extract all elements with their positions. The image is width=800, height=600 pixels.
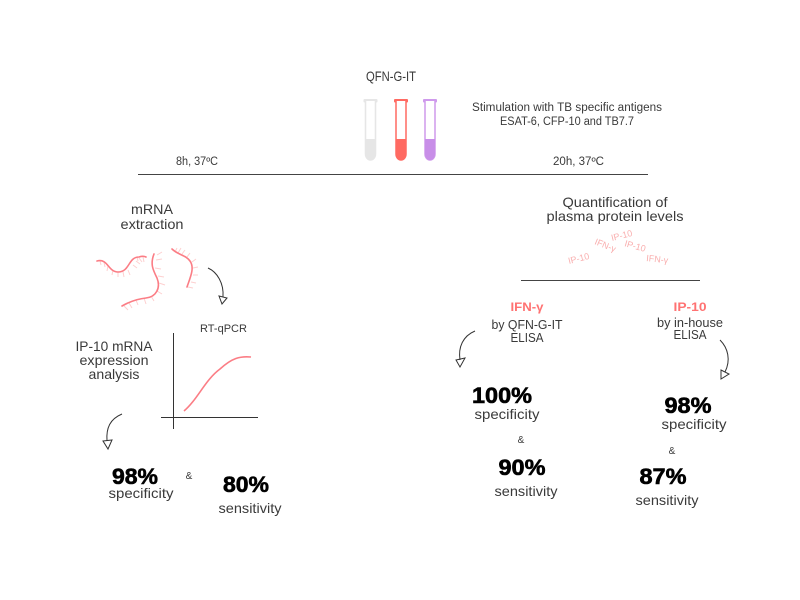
label: RT-qPCR: RT-qPCR xyxy=(200,323,247,335)
heading: quantification xyxy=(546,194,684,224)
timeline xyxy=(138,174,648,176)
heading: IP-10 mRNA expression analysis: expression xyxy=(80,352,148,368)
IFN-gamma label: by QFN-G-IT xyxy=(492,317,563,332)
IP-10 label: ELISA xyxy=(674,327,707,342)
IFN-gamma label: ELISA xyxy=(510,330,544,345)
stimulation text xyxy=(472,102,662,128)
heading: IP-10 mRNA expression analysis: IP-10 mRNA xyxy=(76,338,153,354)
result: 98% specificity xyxy=(108,464,174,501)
heading: mRNA extraction: extraction xyxy=(120,216,184,232)
icon: scattered proteins: IP-10 xyxy=(567,251,590,266)
label: 20h: 20h, 37ºC xyxy=(553,156,604,168)
heading: quantification: plasma protein levels xyxy=(546,208,684,224)
result: 90% sensitivity: sensitivity xyxy=(494,483,558,499)
icon: mRNA strands xyxy=(97,248,198,310)
result: 90% sensitivity xyxy=(494,455,558,499)
icon: test tubes xyxy=(364,99,437,160)
icon: scattered proteins: IFN-γ xyxy=(593,237,618,254)
title: QFN-G-IT xyxy=(366,68,416,84)
IFN-gamma label: IFN-γ xyxy=(510,300,544,314)
result: 90% sensitivity: 90% xyxy=(498,455,546,480)
IFN-gamma label xyxy=(492,300,563,345)
heading: mRNA extraction: mRNA xyxy=(131,201,174,217)
result: 87% sensitivity xyxy=(636,464,698,508)
arrow: to left results xyxy=(103,414,122,449)
label: 8h: 8h, 37ºC xyxy=(176,156,218,168)
result: 87% sensitivity: 87% xyxy=(640,464,686,489)
result: 98% specificity: specificity xyxy=(108,485,174,501)
IP-10 label: by in-house xyxy=(657,315,723,330)
IP-10 label: IP-10 xyxy=(674,300,707,314)
result: 98% specificity xyxy=(662,393,726,432)
arrow: to RT-qPCR xyxy=(208,268,227,304)
result: 98% specificity: specificity xyxy=(662,416,726,432)
IP-10 label xyxy=(657,300,723,342)
result: 80% sensitivity: 80% xyxy=(223,472,269,497)
result: 87% sensitivity: sensitivity xyxy=(636,492,698,508)
heading: IP-10 mRNA expression analysis: analysis xyxy=(88,366,140,382)
arrow: to IP-10 results xyxy=(720,340,729,379)
result: 80% sensitivity: sensitivity xyxy=(218,500,282,516)
result: 98% specificity: 98% xyxy=(664,393,712,418)
result: 98% specificity: 98% xyxy=(112,464,158,489)
arrow: to IFN results xyxy=(456,331,475,367)
icon: scattered proteins: IP-10 xyxy=(610,228,633,243)
heading: mRNA extraction xyxy=(120,201,184,232)
ampersand: & xyxy=(669,446,676,457)
result: 100% specificity xyxy=(472,383,540,422)
result: 100% specificity: specificity xyxy=(474,406,540,422)
heading: IP-10 mRNA expression analysis xyxy=(76,338,153,382)
icon: scattered proteins: IFN-γ xyxy=(646,253,669,265)
icon: scattered proteins xyxy=(567,228,669,266)
ampersand: & xyxy=(186,471,193,482)
divider xyxy=(521,280,700,282)
icon: scattered proteins: IP-10 xyxy=(623,238,647,254)
stimulation text: ESAT-6, CFP-10 and TB7.7 xyxy=(500,116,634,128)
ampersand: & xyxy=(518,435,525,446)
chart: qPCR curve xyxy=(161,333,258,429)
stimulation text: Stimulation with TB specific antigens xyxy=(472,102,662,114)
result: 100% specificity: 100% xyxy=(472,383,532,408)
heading: quantification: Quantification of xyxy=(562,194,668,210)
result: 80% sensitivity xyxy=(218,472,282,516)
